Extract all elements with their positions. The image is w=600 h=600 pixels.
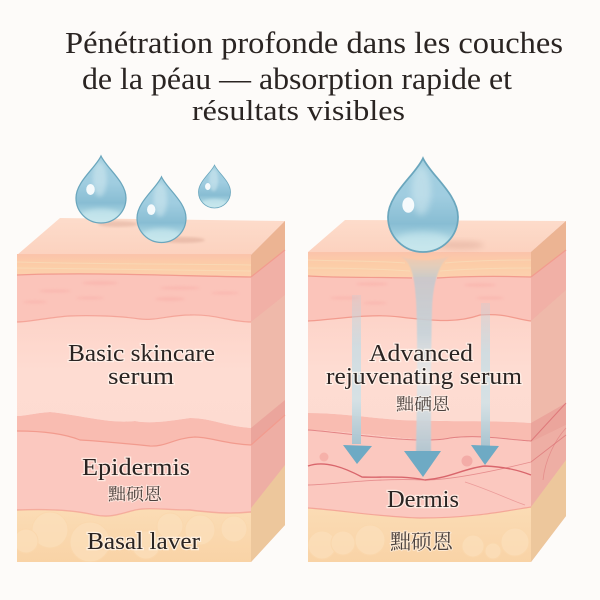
label: basal layer: Basal laver — [87, 529, 200, 555]
title: de la péau — absorption rapide et — [82, 62, 513, 96]
layer lines — [17, 250, 285, 516]
title — [65, 26, 563, 127]
label: epidermis: Epidermis — [82, 455, 190, 481]
epidermis wave band — [17, 412, 251, 446]
side face of skin block — [251, 221, 285, 562]
title: résultats visibles — [192, 95, 405, 127]
label: basic skincare serum: Basic skincare — [68, 341, 215, 367]
fat layer cells — [308, 507, 531, 562]
label: advanced rejuvenating serum: Advanced — [369, 341, 473, 367]
pale middle layer — [308, 315, 531, 423]
top surface of skin — [17, 218, 285, 255]
blood vessels — [308, 403, 566, 505]
side face of skin block — [531, 221, 566, 562]
icon: drop 3 — [198, 165, 230, 209]
panel: advanced serum skin block — [308, 220, 566, 562]
upper dermal layer — [17, 274, 251, 322]
icon: drop 1 — [76, 156, 126, 225]
basal layer cells — [17, 509, 251, 562]
label: epidermis — [82, 455, 190, 505]
epidermis band — [308, 413, 531, 442]
upper dermal layer — [308, 277, 531, 321]
label: basic skincare serum — [68, 341, 215, 390]
label: advanced rejuvenating serum: 黜硒恩 — [396, 390, 451, 415]
label: advanced rejuvenating serum: rejuvenating serum — [326, 364, 522, 390]
top surface of skin — [308, 220, 566, 252]
label: dermis: Dermis — [387, 487, 459, 513]
epidermis cell layer — [17, 431, 251, 516]
pale middle layer — [17, 315, 251, 428]
arrow: left penetration — [343, 295, 372, 464]
title: Pénétration profonde dans les couches — [65, 26, 563, 60]
label: basic skincare serum: serum — [108, 364, 174, 390]
arrow: right penetration — [471, 303, 499, 465]
icon: drop 2 — [137, 177, 186, 244]
stratum corneum layer — [308, 252, 531, 277]
layer lines — [308, 250, 566, 518]
panel: basic skincare skin block — [14, 218, 285, 562]
stratum corneum layer — [17, 254, 251, 277]
label: epidermis: 黜硕恩 — [108, 480, 163, 505]
drop on advanced block — [388, 158, 484, 254]
icon: large drop — [388, 158, 458, 254]
dermis layer — [308, 430, 531, 518]
drops on basic block — [76, 156, 230, 244]
label: hypodermis characters: 黜硕恩 — [390, 526, 454, 556]
label: advanced rejuvenating serum — [326, 341, 522, 415]
arrow: central penetration funnel — [396, 254, 450, 477]
